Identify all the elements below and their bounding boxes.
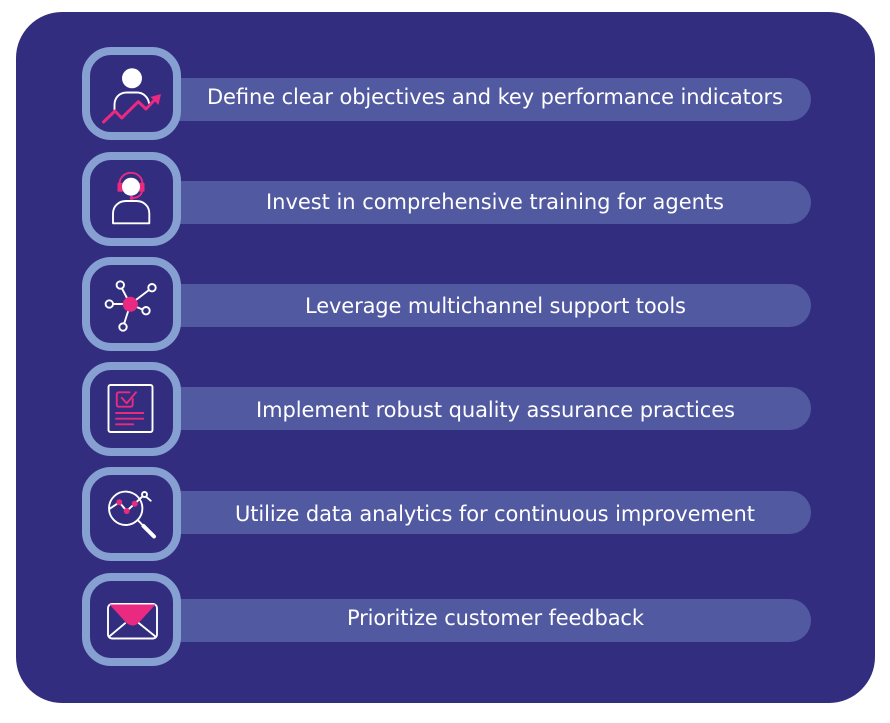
row 4: quality assurance: [86, 366, 811, 452]
row 2: training: [86, 156, 811, 242]
icon frame: row 4: [86, 366, 177, 452]
icon: agent with headset: [113, 173, 149, 223]
pill: row 5: [170, 491, 811, 534]
icon frame: row 2: [86, 156, 177, 242]
pill: row 6: [170, 599, 811, 642]
label: row 5: Utilize data analytics for continuous improvement: [235, 502, 755, 526]
pill: row 1: [170, 78, 811, 121]
label: row 2: Invest in comprehensive training for agents: [266, 190, 724, 214]
icon: person with rising arrow: [104, 68, 161, 122]
icon: network nodes: [106, 281, 156, 331]
pill: row 3: [170, 284, 811, 327]
icon frame: row 5: [86, 471, 177, 557]
icon: magnifier with chart: [109, 492, 154, 536]
icon frame: row 3: [86, 261, 177, 347]
label: row 6: Prioritize customer feedback: [347, 606, 645, 630]
label: row 4: Implement robust quality assurance practices: [256, 398, 735, 422]
label: row 1: Define clear objectives and key performance indicators: [207, 85, 783, 109]
icon frame: row 6: [86, 577, 177, 662]
row 5: data analytics: [86, 471, 811, 557]
icon frame: row 1: [86, 51, 177, 136]
icon: checklist document: [108, 385, 152, 432]
label: row 3: Leverage multichannel support tools: [305, 294, 686, 318]
row 1: define objectives: [86, 51, 811, 136]
pill: row 2: [170, 181, 811, 224]
row 6: customer feedback: [86, 577, 811, 662]
row 3: multichannel: [86, 261, 811, 347]
pill: row 4: [170, 387, 811, 430]
icon: envelope: [108, 604, 157, 638]
